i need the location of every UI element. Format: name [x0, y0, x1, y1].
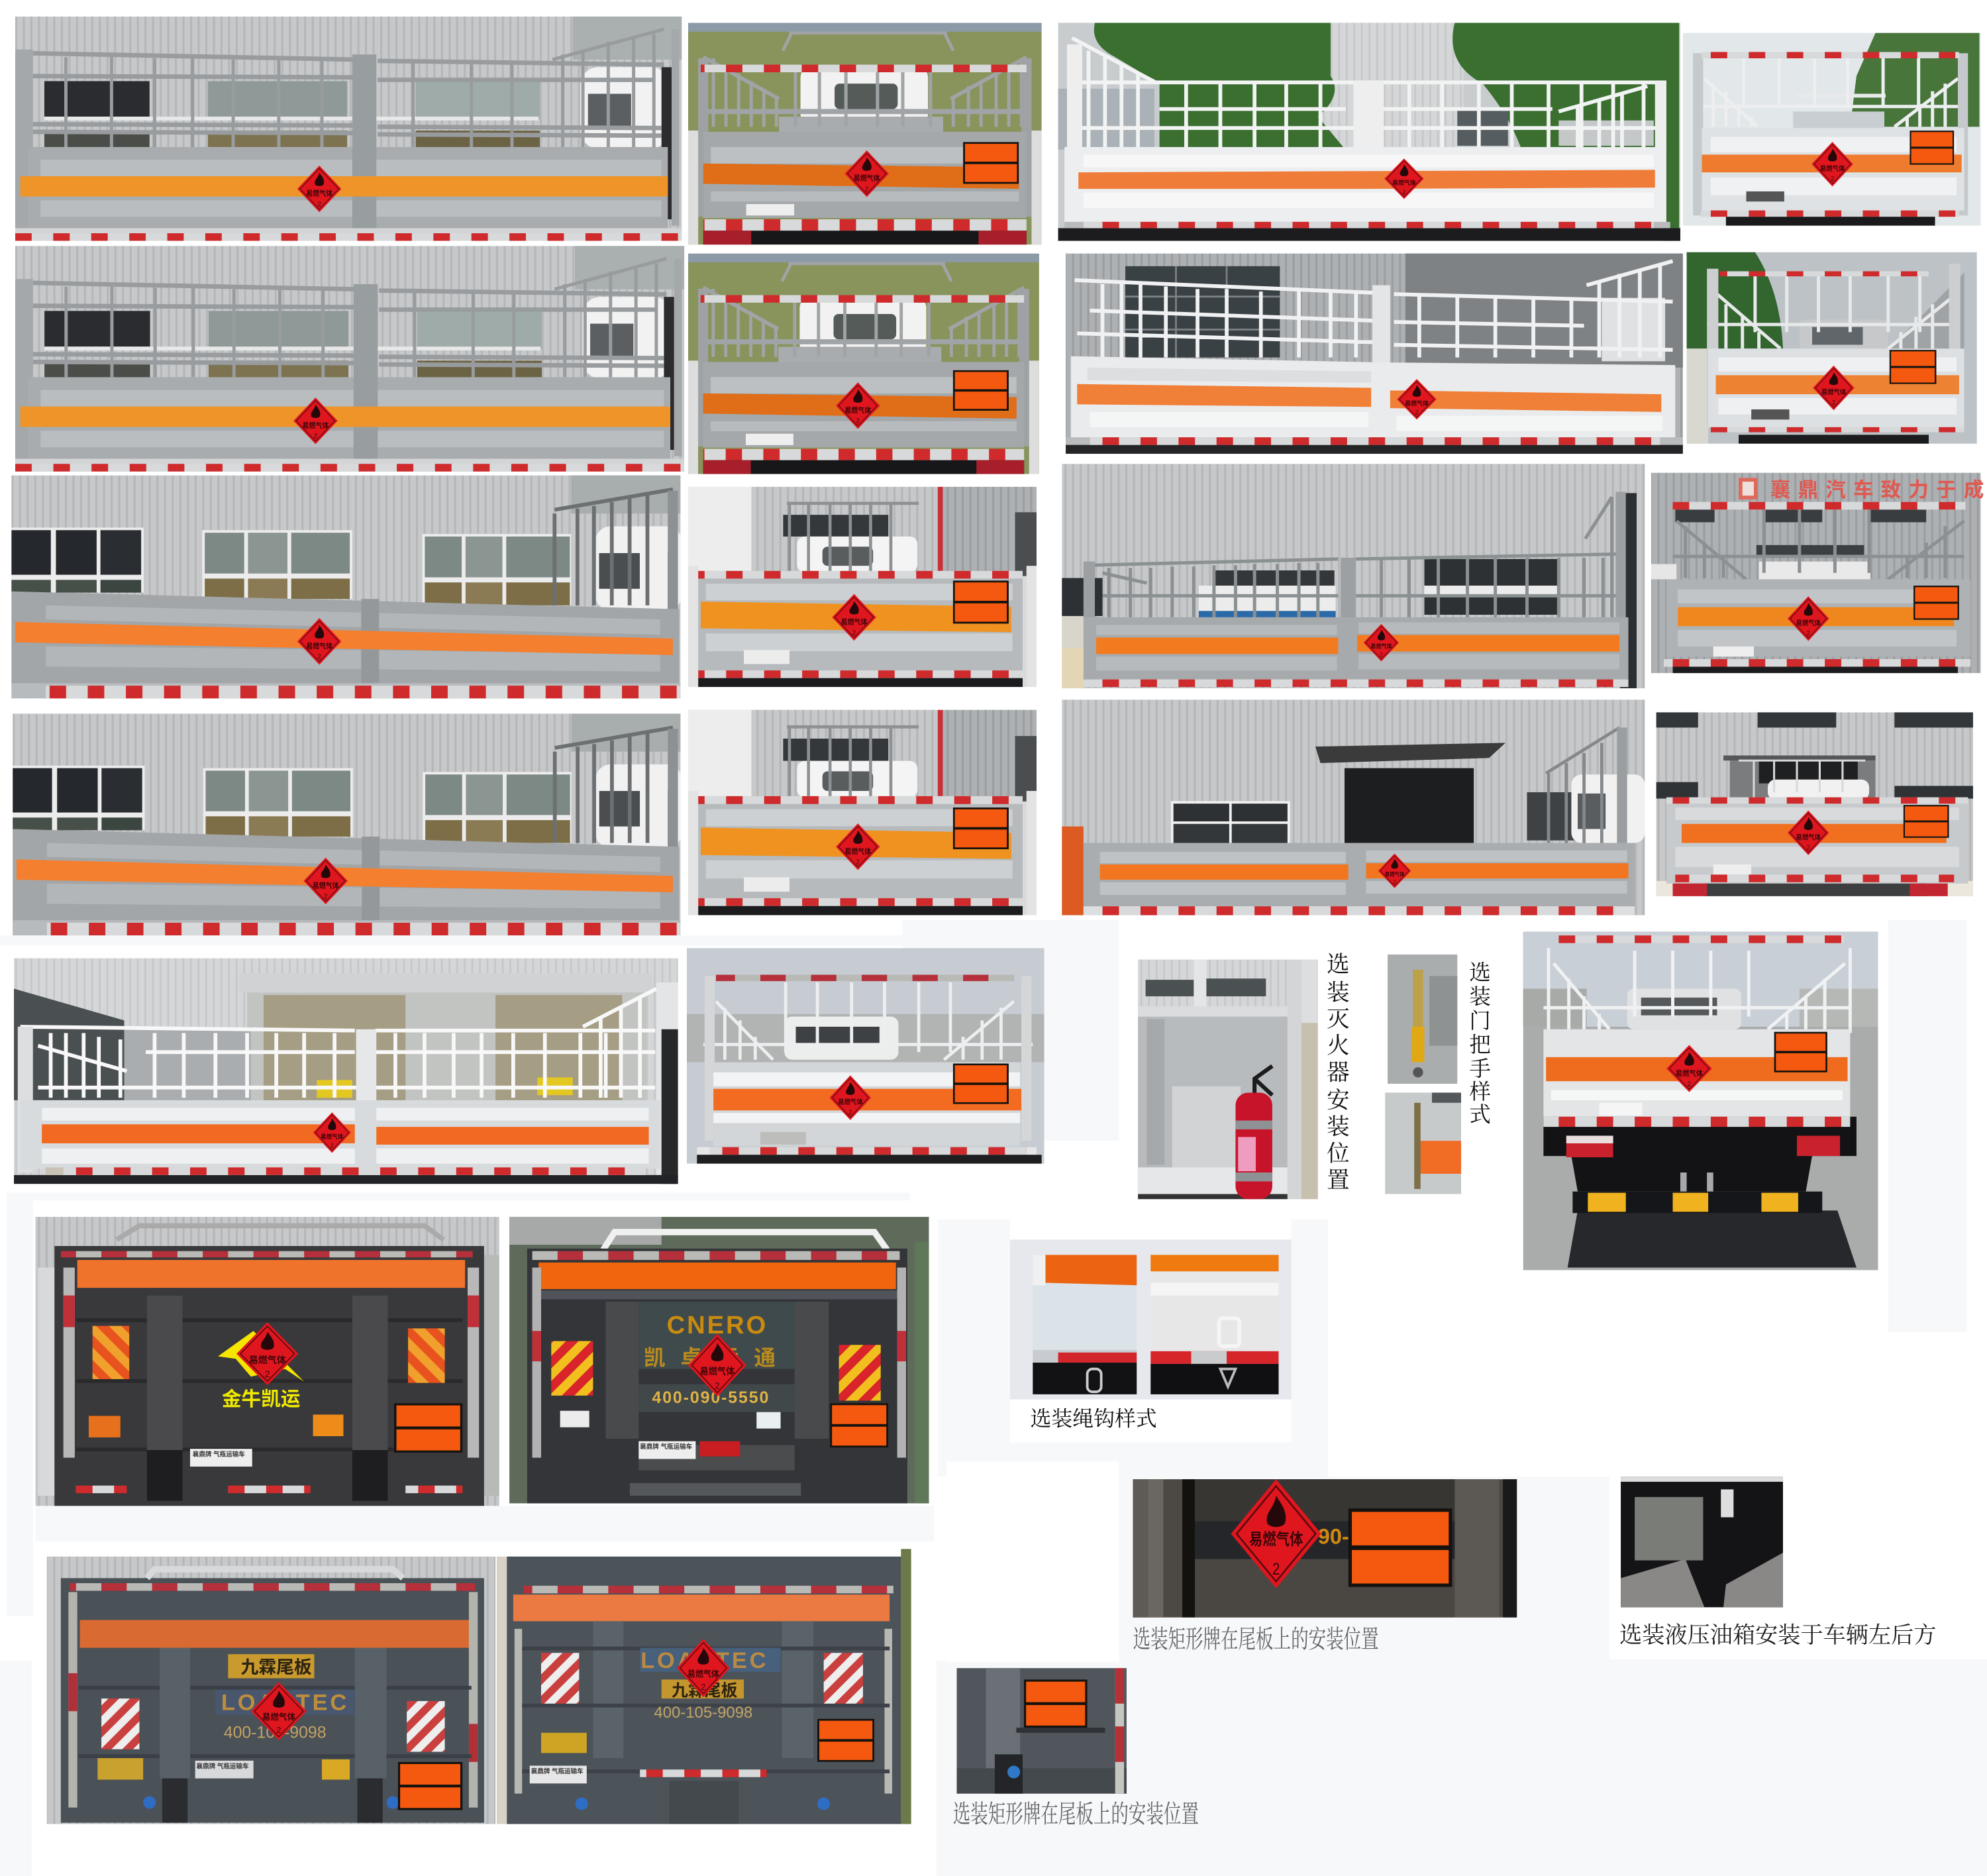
orange placard [1774, 1032, 1827, 1072]
panel: rear view, gray rails, row 1 [688, 23, 1042, 244]
hazard diamond: 2 [314, 433, 317, 441]
striped reflective panels [101, 1698, 445, 1751]
hazard diamond: 2 [317, 653, 321, 661]
hazard diamond: 2 [331, 1142, 334, 1149]
hazard diamond [293, 397, 338, 444]
panel: tail lift, Jinniu Kaiyun [36, 1217, 499, 1506]
hazard diamond [1813, 366, 1855, 410]
hazard diamond [313, 1112, 351, 1153]
caption: hydraulic tank: 选装液压油箱安装于车辆左后方 [1619, 1623, 1936, 1648]
hazard diamond: 2 [1393, 879, 1396, 885]
hazard diamond [677, 1639, 730, 1697]
hazard diamond: 2 [1688, 1080, 1691, 1088]
orange placard [394, 1403, 462, 1453]
gold brand plate: 九霖尾板 [241, 1657, 312, 1677]
hazard diamond: 易燃气体 [302, 421, 329, 430]
photo: fire extinguisher location [1138, 960, 1318, 1199]
hazard diamond: 易燃气体 [688, 1669, 719, 1679]
vehicle plate: 襄鼎牌 气瓶运输车 [193, 1451, 245, 1459]
orange placard [1890, 350, 1936, 384]
panel: placard location on tailboard, close-up [1133, 1479, 1517, 1618]
gold brand plate [228, 1654, 314, 1678]
caption: door handle style: 样 [1469, 1080, 1491, 1104]
hazard diamond: 2 [276, 1725, 281, 1735]
hazard diamond: 2 [856, 418, 860, 425]
caption: fire extinguisher location: 置 [1327, 1168, 1350, 1193]
hazard diamond: 易燃气体 [306, 642, 333, 651]
orange placard [1910, 130, 1954, 165]
hazard diamond [1811, 142, 1853, 186]
hazard diamond: 易燃气体 [1676, 1069, 1704, 1078]
panel: rear view, row 5 [687, 948, 1044, 1164]
hazard diamond: 易燃气体 [1392, 179, 1416, 186]
brand lettering: 襄鼎汽车致力于成 [1770, 479, 1987, 501]
panel: side view, white rails with building [1066, 254, 1683, 454]
panel: rear view, white rails, row 1 [1683, 33, 1980, 226]
hazard diamond: 易燃气体 [1370, 643, 1392, 650]
partial phone digits: 90- [1318, 1525, 1349, 1549]
panel: side view, low sides, row 3 [11, 476, 682, 698]
brand name: 凯卓运通 [644, 1346, 791, 1370]
hazard diamond: 易燃气体 [1385, 870, 1405, 877]
orange placard [817, 1719, 874, 1762]
hazard diamond: 2 [1807, 844, 1810, 852]
caption: placard location: 选装矩形牌在尾板上的安装位置 [1133, 1626, 1379, 1654]
panel: side view, rails and wall, row 3 [1062, 464, 1645, 688]
orange placard [1024, 1679, 1088, 1728]
hazard diamond [1397, 379, 1437, 419]
caption: placard location, small crop: 选装矩形牌在尾板上的安装位置 [953, 1800, 1199, 1829]
panel: tail lift, Jiulin blue gray [497, 1549, 911, 1824]
panel: rear view with brand lettering [1651, 473, 1987, 673]
hazard diamond [251, 1682, 307, 1740]
orange placard [953, 580, 1009, 623]
phone number: 400-105-9098 [224, 1723, 327, 1742]
vehicle plate: 襄鼎牌 气瓶运输车 [197, 1762, 249, 1770]
panel: side view, gray rails, row 2 [15, 246, 684, 472]
hazard diamond: 2 [701, 1683, 705, 1692]
hazard diamond [836, 382, 880, 429]
orange placard [398, 1762, 462, 1810]
orange placard [953, 370, 1009, 411]
caption: fire extinguisher location: 灭 [1327, 1007, 1350, 1032]
caption: door handle style: 式 [1469, 1102, 1491, 1127]
orange placard [1349, 1508, 1452, 1587]
white area behind tailboard caption [946, 1461, 1119, 1662]
panel: side view, white rails with trees [1058, 23, 1680, 241]
panel: full rear view of truck [1523, 931, 1878, 1270]
hazard diamond: 易燃气体 [854, 174, 880, 183]
caption: door handle style: 手 [1469, 1058, 1491, 1082]
orange placard [1913, 586, 1959, 620]
caption: fire extinguisher location: 器 [1327, 1060, 1350, 1085]
caption: door handle style: 门 [1469, 1009, 1491, 1033]
panel: placard location, small crop [957, 1668, 1127, 1794]
hazard diamond: 2 [865, 185, 869, 193]
panel: side view, gray rails, row 1 [15, 17, 682, 241]
hazard diamond: 易燃气体 [249, 1355, 286, 1365]
hazard diamond: 2 [317, 201, 321, 209]
hazard diamond: 易燃气体 [844, 847, 872, 856]
hazard diamond: 2 [852, 629, 856, 637]
hazard diamond [303, 858, 348, 904]
hazard diamond: 2 [1415, 409, 1419, 416]
hazard diamond: 易燃气体 [838, 1098, 863, 1106]
caption: fire extinguisher location: 装 [1327, 1115, 1350, 1140]
photo: door handle, with stripe [1385, 1092, 1461, 1194]
caption: door handle style: 装 [1469, 985, 1491, 1010]
hazard diamond: 易燃气体 [1821, 388, 1847, 397]
hazard diamond [829, 1075, 871, 1120]
light background patches [0, 920, 1987, 1876]
photo: hook on blue-white board [1033, 1255, 1137, 1394]
hazard diamond: 易燃气体 [1820, 164, 1845, 173]
hazard diamond: 易燃气体 [306, 189, 333, 198]
panel: rope hook styles [1010, 1220, 1292, 1443]
panel: rear view, gray rails, row 2 [688, 254, 1039, 474]
LOADTEC band: LOADTEC [221, 1690, 349, 1715]
hazard diamond: 2 [324, 893, 328, 900]
caption: fire extinguisher location: 安 [1327, 1088, 1350, 1113]
panel: rear view, green tree, row 2 [1687, 252, 1977, 444]
hazard diamond: 易燃气体 [841, 617, 868, 627]
hazard diamond: 2 [1831, 176, 1834, 183]
reflective chevron panels [551, 1341, 881, 1400]
hazard diamond [836, 823, 880, 870]
hazard diamond: 易燃气体 [1796, 619, 1821, 627]
hazard diamond: 2 [856, 859, 860, 866]
phone number: 400-105-9098 [654, 1704, 752, 1722]
reflective chevron panels [93, 1326, 445, 1383]
hazard diamond: 易燃气体 [1405, 399, 1429, 407]
caption: fire extinguisher location: 火 [1327, 1033, 1350, 1059]
brand name: 金牛凯运 [222, 1388, 301, 1410]
hazard diamond: 2 [1402, 189, 1405, 195]
hazard diamond [1788, 811, 1829, 855]
striped reflective panels [541, 1653, 863, 1704]
hazard diamond [1231, 1479, 1321, 1589]
hazard diamond [844, 150, 889, 197]
rear bumper [1572, 1192, 1822, 1213]
photo: door handle, closed [1388, 955, 1457, 1084]
hazard diamond [688, 1333, 746, 1396]
hazard diamond: 2 [1380, 652, 1383, 658]
hazard diamond: 易燃气体 [313, 881, 339, 890]
panel: rear view, low sides, row 3 [688, 487, 1037, 687]
hazard diamond [832, 594, 876, 641]
CNERO logo: CNERO [667, 1311, 768, 1339]
panel: side view, low sides, row 4 [13, 713, 682, 935]
caption: rope hook style: 选装绳钩样式 [1030, 1408, 1157, 1431]
orange placard [963, 142, 1019, 183]
hazard diamond: 2 [1272, 1559, 1280, 1579]
hazard diamond: 2 [848, 1109, 852, 1116]
LOADTEC band: LOADTEC [640, 1648, 768, 1673]
brand logo [1739, 478, 1758, 499]
vehicle plate [195, 1761, 254, 1779]
hazard diamond [1384, 158, 1424, 199]
hazard diamond: 易燃气体 [700, 1366, 735, 1377]
hazard diamond: 易燃气体 [844, 406, 872, 415]
hazard diamond: 2 [265, 1369, 270, 1379]
panel: tail lift, Jiulin gray [47, 1557, 495, 1824]
gold brand plate: 九霖尾板 [672, 1681, 738, 1700]
caption: fire extinguisher location: 选 [1327, 953, 1350, 978]
panel: rear view, building behind [1656, 712, 1973, 896]
panel: hydraulic tank [1621, 1477, 1783, 1607]
vehicle plate: 襄鼎牌 气瓶运输车 [531, 1767, 584, 1775]
brand logo [218, 1331, 304, 1382]
hazard diamond: 2 [1807, 630, 1810, 637]
orange placard [1904, 805, 1949, 838]
caption: fire extinguisher location: 位 [1327, 1141, 1350, 1167]
orange placard [953, 808, 1009, 849]
hazard diamond [1378, 854, 1411, 888]
vehicle plate [190, 1449, 252, 1467]
photo: hook on white board [1150, 1255, 1278, 1394]
hazard diamond: 2 [715, 1381, 720, 1391]
hazard diamond [1788, 596, 1829, 641]
hazard diamond [1364, 624, 1399, 661]
vehicle plate [530, 1766, 587, 1783]
vehicle plate [638, 1441, 695, 1459]
caption: door handle style: 把 [1469, 1033, 1491, 1057]
panel: side view, building door [1062, 700, 1645, 915]
tail lights [1566, 1136, 1840, 1157]
orange placard [830, 1403, 888, 1447]
vehicle plate: 襄鼎牌 气瓶运输车 [640, 1443, 693, 1451]
hazard diamond: 易燃气体 [1796, 833, 1821, 841]
phone number: 400-090-5550 [652, 1388, 770, 1407]
caption: fire extinguisher location: 装 [1327, 980, 1350, 1006]
caption: door handle style: 选 [1469, 961, 1491, 985]
hazard diamond: 易燃气体 [262, 1712, 295, 1722]
hazard diamond [297, 166, 341, 212]
hazard diamond: 2 [1832, 399, 1835, 407]
panel: tail lift, CNERO [509, 1217, 929, 1503]
icon: fire extinguisher [1235, 1066, 1272, 1199]
hazard diamond [236, 1322, 298, 1385]
hazard diamond [297, 618, 341, 664]
panel: rear view, low sides, row 4 [688, 710, 1037, 915]
panel: side view, white rails, row 5 [14, 959, 678, 1184]
orange placard [953, 1063, 1009, 1104]
hazard diamond: 易燃气体 [321, 1133, 344, 1140]
hazard diamond: 易燃气体 [1249, 1530, 1303, 1548]
hazard diamond [1666, 1045, 1712, 1092]
